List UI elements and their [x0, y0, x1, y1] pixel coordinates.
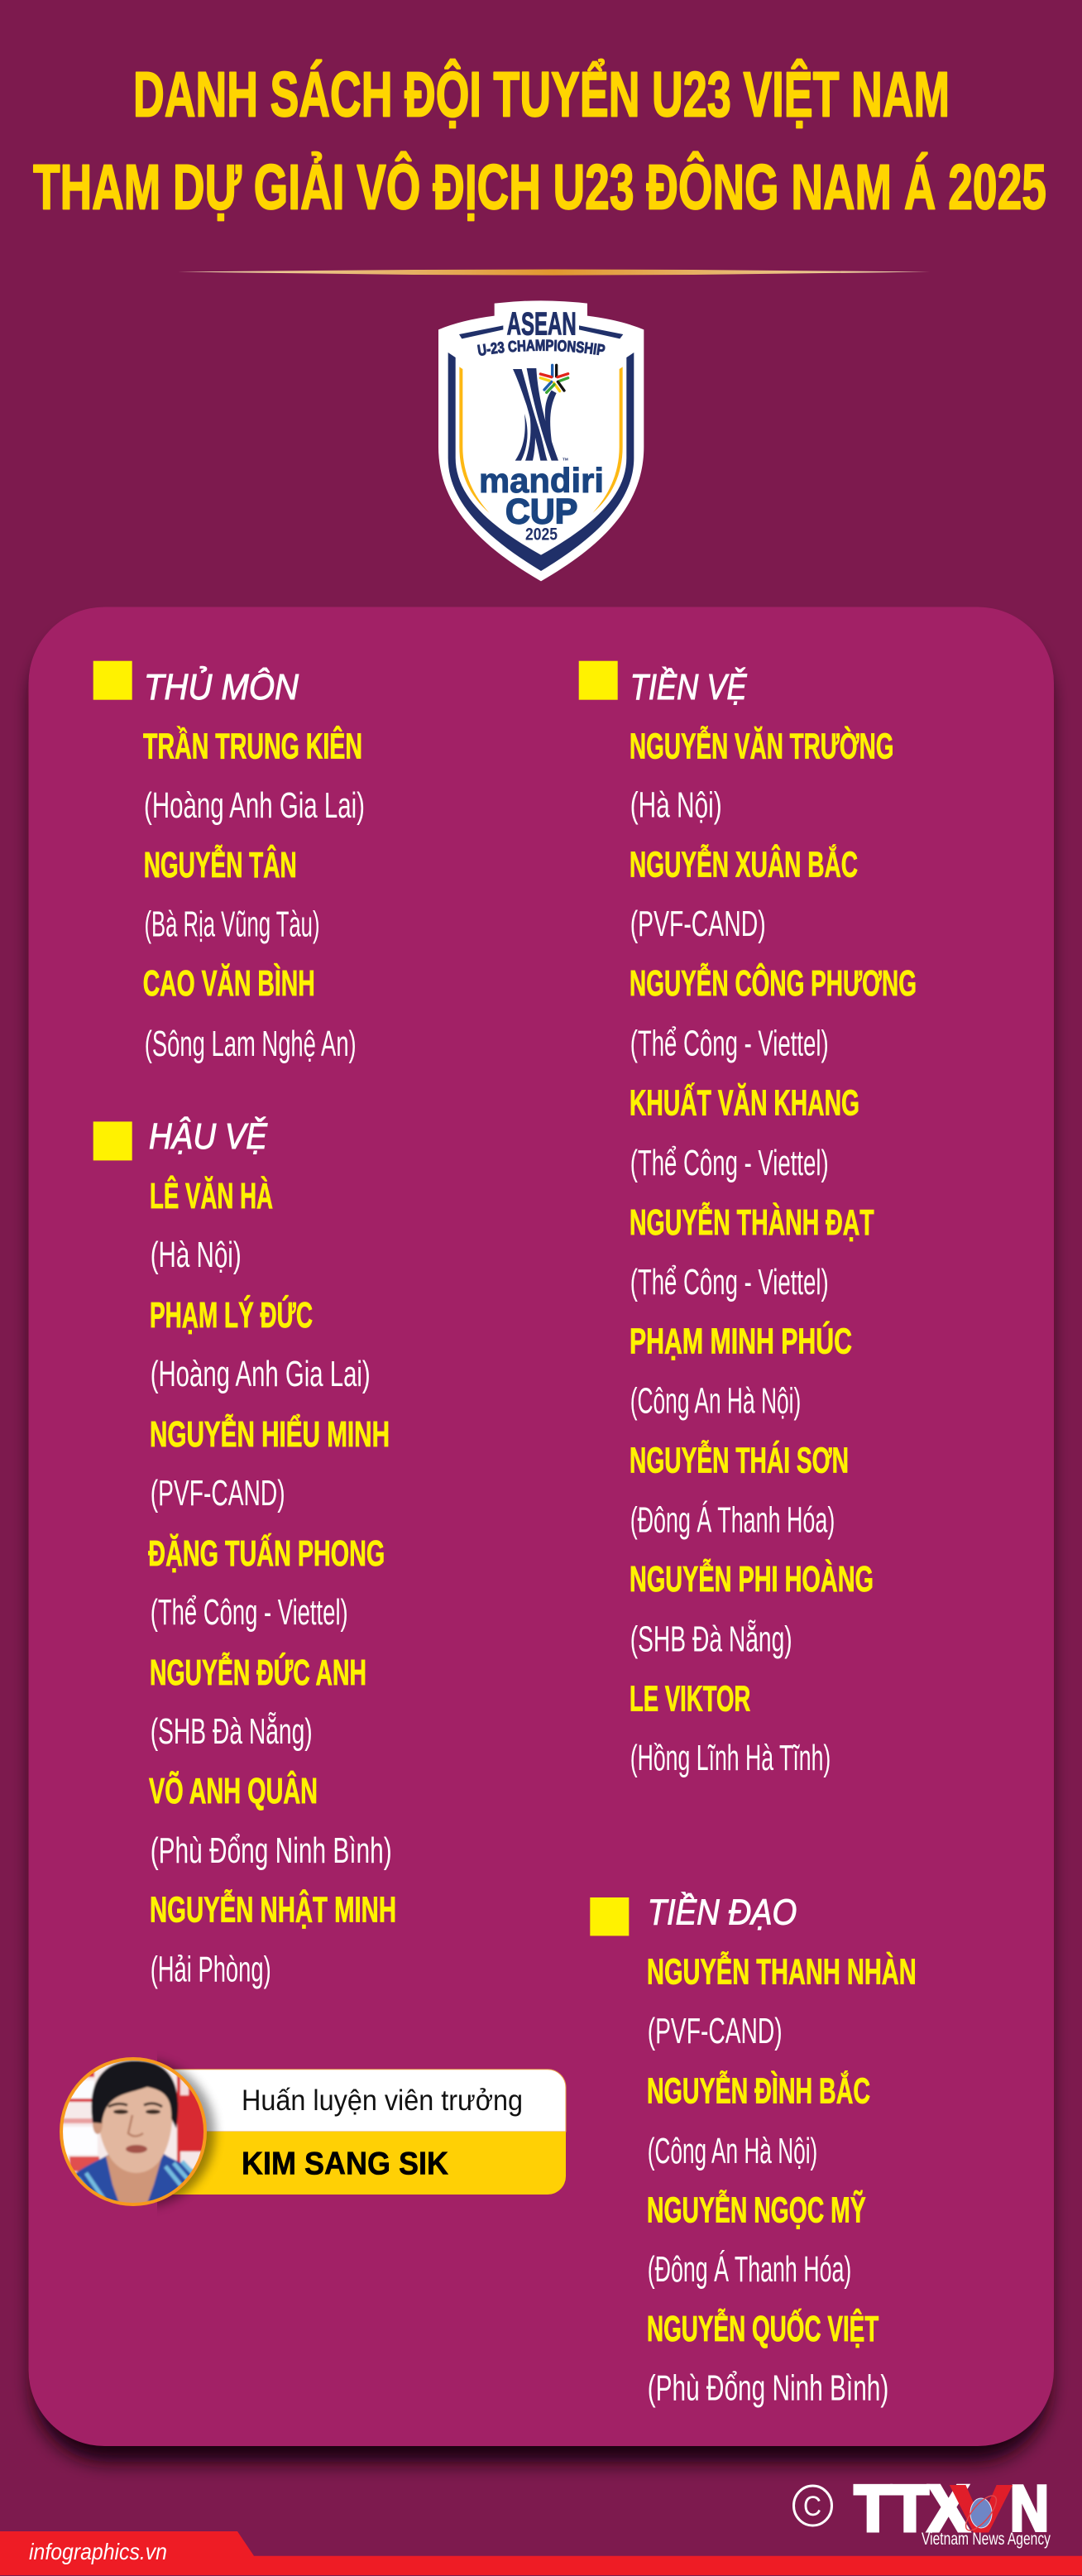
logo: TTXVN Vietnam News Agency: V	[950, 2472, 1012, 2546]
player: Đặng Tuấn Phong: (Thể Công - Viettel)	[151, 1593, 348, 1633]
title	[33, 58, 1046, 223]
player: Lê Văn Hà: LÊ VĂN HÀ	[150, 1175, 273, 1216]
player: Nguyễn Ngọc Mỹ: (Đông Á Thanh Hóa)	[648, 2249, 851, 2290]
heading: Thủ môn: THỦ MÔN	[144, 665, 299, 708]
logo: ASEAN U-23 Championship Mandiri Cup 2025: TM	[563, 458, 568, 462]
player: Nguyễn Công Phương	[630, 962, 917, 1064]
logo: TTXVN Vietnam News Agency: TTX	[855, 2472, 969, 2545]
player: Võ Anh Quân: VÕ ANH QUÂN	[149, 1770, 318, 1811]
section: forwards	[590, 1892, 917, 2408]
logo: ASEAN U-23 Championship Mandiri Cup 2025: CUP	[505, 492, 577, 532]
player: Trần Trung Kiên: TRẦN TRUNG KIÊN	[143, 725, 362, 766]
player: Cao Văn Bình	[143, 962, 357, 1064]
player: Nguyễn Đức Anh: NGUYỄN ĐỨC ANH	[150, 1652, 366, 1693]
player: Cao Văn Bình: CAO VĂN BÌNH	[143, 962, 315, 1004]
player: Trần Trung Kiên: (Hoàng Anh Gia Lai)	[144, 786, 365, 826]
player: Nguyễn Thái Sơn: NGUYỄN THÁI SƠN	[630, 1440, 849, 1481]
player: Le Viktor	[630, 1680, 831, 1778]
player: Lê Văn Hà: (Hà Nội)	[151, 1235, 242, 1275]
player: Nguyễn Nhật Minh	[150, 1888, 396, 1989]
player: Nguyễn Thành Đạt: (Thể Công - Viettel)	[630, 1263, 829, 1302]
section: midfielders	[579, 661, 917, 1778]
player: Khuất Văn Khang	[630, 1082, 859, 1183]
player: Cao Văn Bình: (Sông Lam Nghệ An)	[145, 1024, 357, 1064]
player: Nguyễn Tân: NGUYỄN TÂN	[144, 844, 297, 885]
card: coach title and name: KIM SANG SIK	[242, 2147, 448, 2182]
player: Nguyễn Thái Sơn	[630, 1440, 849, 1541]
player: Nguyễn Đình Bắc: (Công An Hà Nội)	[648, 2132, 817, 2171]
logo: ASEAN U-23 Championship Mandiri Cup 2025: 2025	[525, 524, 558, 544]
logo: ASEAN U-23 Championship Mandiri Cup 2025: mandiri	[479, 461, 604, 500]
player: Đặng Tuấn Phong: ĐẶNG TUẤN PHONG	[148, 1533, 385, 1574]
player: Nguyễn Xuân Bắc: NGUYỄN XUÂN BẮC	[630, 844, 858, 885]
footer: red bar with infographics.vn tab	[0, 2531, 1082, 2575]
player: Nguyễn Tân	[144, 844, 319, 945]
icon: yellow square	[590, 1897, 629, 1936]
player: Nguyễn Ngọc Mỹ	[647, 2189, 866, 2290]
logo: TTXVN Vietnam News Agency: C	[803, 2491, 821, 2522]
player: Nguyễn Thanh Nhàn: (PVF-CAND)	[648, 2012, 783, 2051]
player: Nguyễn Hiểu Minh	[150, 1413, 390, 1513]
player: Nguyễn Thành Đạt: NGUYỄN THÀNH ĐẠT	[630, 1202, 874, 1243]
player: Nguyễn Thanh Nhàn: NGUYỄN THANH NHÀN	[647, 1951, 917, 1993]
logo: ASEAN U-23 Championship Mandiri Cup 2025: ASEAN	[507, 305, 577, 342]
player: Nguyễn Quốc Việt: (Phù Đổng Ninh Bình)	[648, 2368, 888, 2408]
heading: Tiền vệ: TIỀN VỆ	[630, 666, 748, 708]
logo: TTXVN Vietnam News Agency: N	[1010, 2472, 1049, 2545]
player: Nguyễn Phi Hoàng: NGUYỄN PHI HOÀNG	[630, 1558, 874, 1600]
player: Phạm Minh Phúc	[630, 1321, 852, 1422]
player: Nguyễn Đức Anh: (SHB Đà Nẵng)	[151, 1711, 313, 1752]
player: Nguyễn Tân: (Bà Rịa Vũng Tàu)	[144, 905, 319, 945]
player: Nguyễn Thành Đạt	[630, 1202, 874, 1302]
logo: TTXVN Vietnam News Agency	[794, 2472, 1051, 2549]
card: coach title and name: Huấn luyện viên trưởng	[242, 2084, 523, 2117]
icon: yellow square	[93, 661, 132, 700]
icon: yellow square	[579, 661, 618, 700]
panel: squad list	[28, 607, 1054, 2446]
section: defenders	[93, 1116, 396, 1989]
player: Phạm Minh Phúc: (Công An Hà Nội)	[630, 1382, 801, 1422]
card: coach title and name	[165, 2070, 566, 2195]
icon: yellow square	[93, 1121, 132, 1160]
player: Nguyễn Nhật Minh: NGUYỄN NHẬT MINH	[150, 1888, 396, 1930]
player: Đặng Tuấn Phong	[148, 1533, 385, 1633]
player: Nguyễn Nhật Minh: (Hải Phòng)	[151, 1950, 271, 1989]
logo: ASEAN U-23 Championship Mandiri Cup 2025: U-23 CHAMPIONSHIP	[476, 339, 606, 356]
player: Nguyễn Quốc Việt	[647, 2307, 888, 2408]
player: Trần Trung Kiên	[143, 725, 365, 826]
footer: red bar with infographics.vn tab: infographics.vn	[29, 2539, 167, 2564]
callout: head coach	[58, 2056, 566, 2209]
player: Nguyễn Hiểu Minh: (PVF-CAND)	[151, 1474, 285, 1513]
player: Nguyễn Xuân Bắc	[630, 844, 858, 944]
player: Nguyễn Thái Sơn: (Đông Á Thanh Hóa)	[630, 1500, 835, 1541]
section: goalkeepers	[93, 661, 365, 1064]
logo: ASEAN U-23 Championship Mandiri Cup 2025	[438, 300, 644, 581]
player: Phạm Lý Đức	[150, 1294, 371, 1394]
photo: coach portrait	[58, 2056, 210, 2209]
player: Nguyễn Xuân Bắc: (PVF-CAND)	[630, 904, 766, 944]
player: Nguyễn Công Phương: (Thể Công - Viettel)	[630, 1024, 829, 1064]
player: Phạm Lý Đức: PHẠM LÝ ĐỨC	[150, 1294, 313, 1336]
player: Võ Anh Quân: (Phù Đổng Ninh Bình)	[151, 1831, 392, 1871]
player: Nguyễn Hiểu Minh: NGUYỄN HIỂU MINH	[150, 1413, 390, 1455]
heading: Tiền đạo: TIỀN ĐẠO	[648, 1892, 797, 1933]
player: Nguyễn Văn Trường: NGUYỄN VĂN TRƯỜNG	[630, 725, 893, 766]
player: Nguyễn Công Phương: NGUYỄN CÔNG PHƯƠNG	[630, 962, 917, 1004]
player: Nguyễn Quốc Việt: NGUYỄN QUỐC VIỆT	[647, 2307, 879, 2349]
player: Nguyễn Ngọc Mỹ: NGUYỄN NGỌC MỸ	[647, 2189, 866, 2230]
player: Nguyễn Đình Bắc: NGUYỄN ĐÌNH BẮC	[647, 2070, 870, 2112]
player: Nguyễn Phi Hoàng	[630, 1558, 874, 1660]
player: Khuất Văn Khang: KHUẤT VĂN KHANG	[630, 1082, 859, 1124]
player: Le Viktor: LE VIKTOR	[630, 1680, 750, 1720]
player: Nguyễn Đình Bắc	[647, 2070, 870, 2171]
player: Nguyễn Văn Trường: (Hà Nội)	[630, 786, 722, 826]
player: Khuất Văn Khang: (Thể Công - Viettel)	[630, 1144, 829, 1183]
player: Phạm Lý Đức: (Hoàng Anh Gia Lai)	[151, 1355, 371, 1394]
player: Nguyễn Phi Hoàng: (SHB Đà Nẵng)	[630, 1619, 792, 1660]
player: Nguyễn Đức Anh	[150, 1652, 366, 1752]
player: Nguyễn Thanh Nhàn	[647, 1951, 917, 2051]
player: Phạm Minh Phúc: PHẠM MINH PHÚC	[630, 1321, 852, 1362]
heading: Hậu vệ: HẬU VỆ	[149, 1116, 268, 1157]
player: Le Viktor: (Hồng Lĩnh Hà Tĩnh)	[630, 1739, 831, 1778]
player: Nguyễn Văn Trường	[630, 725, 893, 826]
player: Võ Anh Quân	[149, 1770, 392, 1871]
player: Lê Văn Hà	[150, 1175, 273, 1275]
